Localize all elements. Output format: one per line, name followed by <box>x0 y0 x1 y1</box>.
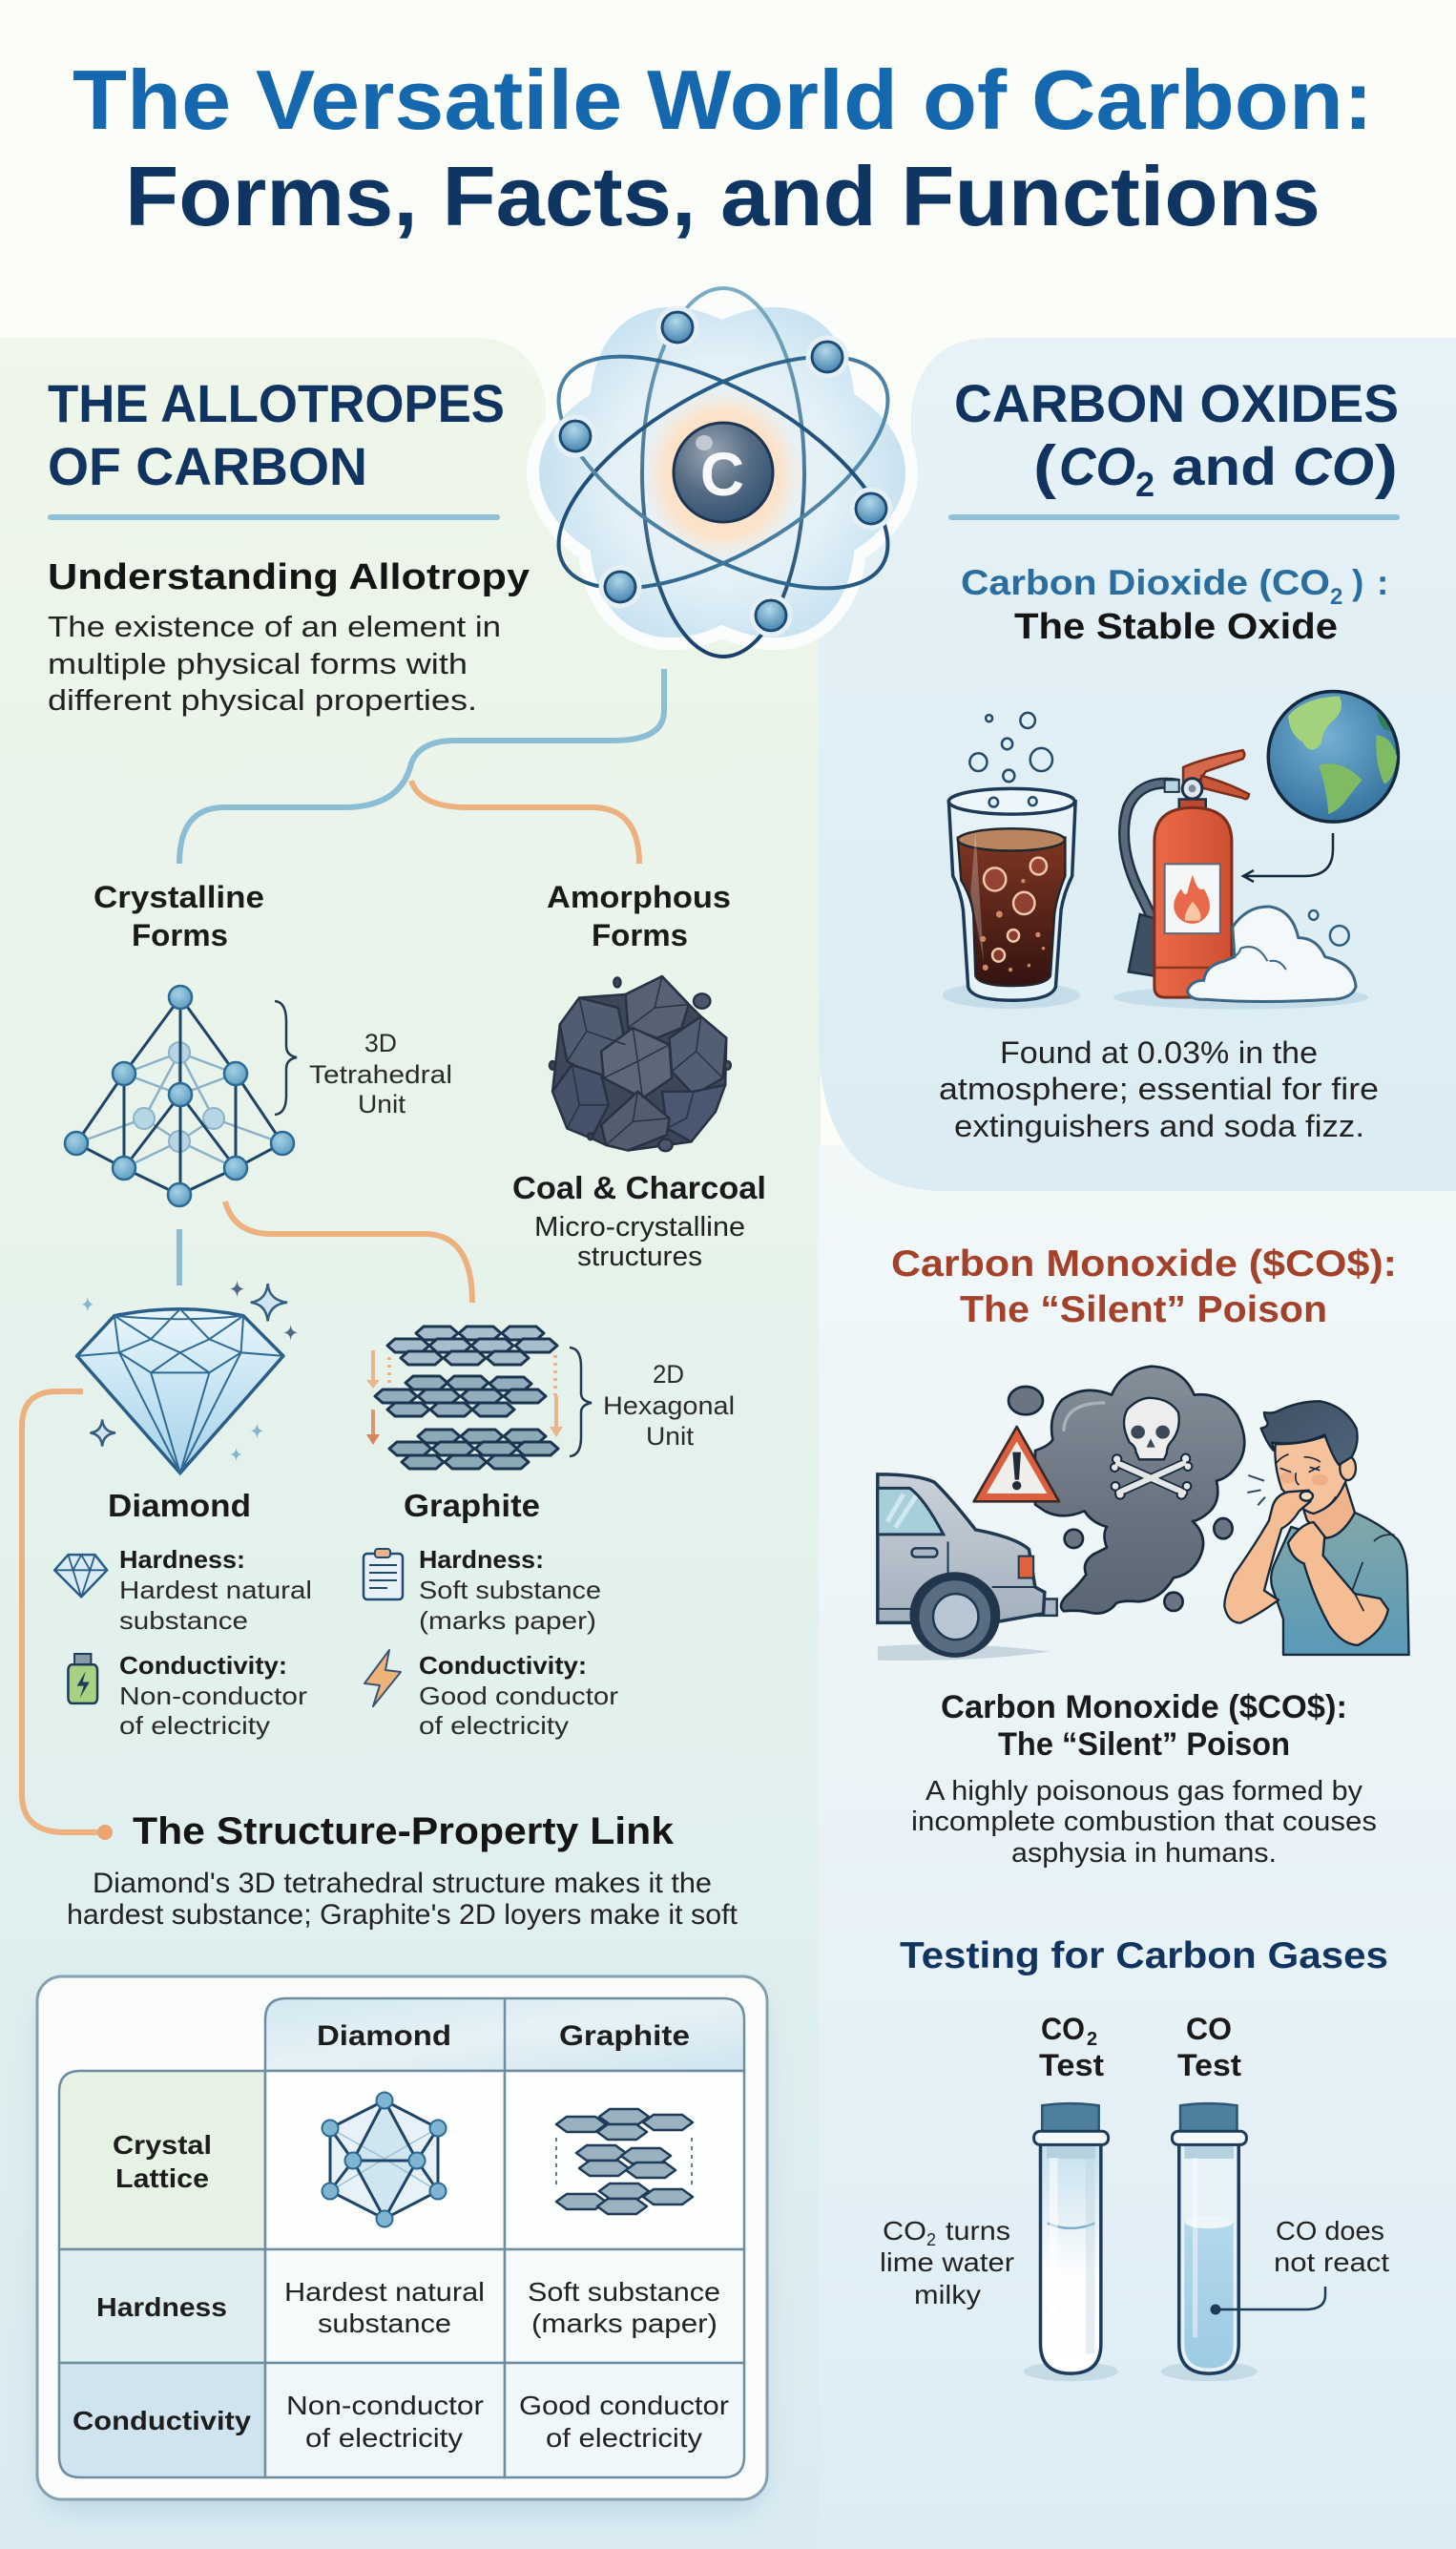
icon: warning triangle <box>974 1427 1059 1501</box>
text block: understanding allotropy: different physical properties. <box>48 683 477 717</box>
bracket: 2D unit <box>570 1348 592 1456</box>
label: crystalline forms: Forms <box>132 918 228 952</box>
icon: soda glass <box>943 713 1080 1009</box>
heading: allotropes: OF CARBON <box>48 436 367 496</box>
arrow: atmosphere to extinguisher <box>1243 833 1333 882</box>
callout: CO2 turns lime water milky: lime water <box>880 2247 1014 2277</box>
icon: mini graphite layers <box>556 2109 693 2214</box>
text block: diamond hardness: substance <box>119 1606 248 1635</box>
label: CO test <box>1177 2012 1241 2082</box>
text block: carbon monoxide description: incomplete combustion that couses <box>911 1807 1377 1837</box>
text block: understanding allotropy: Understanding Allotropy <box>48 557 530 597</box>
text block: carbon dioxide facts: Found at 0.03% in the <box>1000 1035 1318 1070</box>
icon: smoke cloud with skull <box>1009 1367 1244 1614</box>
label: crystalline forms <box>94 880 264 952</box>
text block: carbon monoxide description: Carbon Monoxide ($CO$): <box>941 1689 1347 1725</box>
text block: structure-property link: Diamond's 3D tetrahedral structure makes it the <box>93 1868 712 1899</box>
label: CO test: CO <box>1186 2012 1232 2046</box>
label: coal and charcoal: Micro-crystalline <box>534 1212 745 1243</box>
icon: coal and charcoal <box>550 976 731 1151</box>
label: crystalline forms: Crystalline <box>94 880 264 914</box>
heading: carbon dioxide: Carbon Dioxide (CO <box>961 563 1330 602</box>
icon: CO test tube <box>1161 2103 1258 2381</box>
label: 3D tetrahedral unit: 3D <box>364 1029 397 1057</box>
icon: carbon atom: C <box>700 440 744 509</box>
text block: structure-property link: The Structure-Property Link <box>133 1810 675 1852</box>
title: The Versatile World of Carbon: <box>73 52 1373 147</box>
label: 3D tetrahedral unit: Tetrahedral <box>309 1060 452 1089</box>
label: CO2 test: CO <box>1041 2012 1085 2046</box>
label: amorphous forms <box>547 880 731 952</box>
label: 3D tetrahedral unit <box>309 1029 452 1118</box>
heading: carbon oxides: ) <box>1375 434 1398 500</box>
text block: understanding allotropy: multiple physical forms with <box>48 647 468 680</box>
label: 2D hexagonal unit: Unit <box>646 1422 695 1451</box>
heading: carbon monoxide <box>891 1243 1397 1330</box>
icon: coughing man <box>1224 1401 1409 1655</box>
heading: carbon oxides: CO <box>1059 436 1135 496</box>
icon: clipboard <box>364 1549 403 1599</box>
connector: lattice to graphite <box>225 1201 472 1303</box>
table row: hardness: Soft substance <box>528 2277 720 2307</box>
text block: graphite hardness: (marks paper) <box>419 1606 596 1635</box>
icon: mini diamond lattice <box>322 2092 447 2227</box>
heading: testing for carbon gases: Testing for Carbon Gases <box>900 1935 1388 1976</box>
title <box>73 52 1373 243</box>
heading: carbon dioxide <box>961 563 1388 647</box>
connector: diamond to structure-property link <box>22 1391 113 1840</box>
text block: diamond hardness <box>119 1545 312 1635</box>
connector: crystalline and amorphous branches <box>179 669 664 864</box>
table header row: Diamond <box>317 2020 451 2052</box>
table header row: Graphite <box>559 2020 690 2052</box>
label: coal and charcoal: structures <box>577 1242 702 1272</box>
text block: structure-property link <box>67 1810 738 1931</box>
label: CO2 test: Test <box>1039 2048 1104 2082</box>
chart: 3D tetrahedral lattice <box>65 986 294 1206</box>
table row: hardness: (marks paper) <box>531 2309 718 2338</box>
text block: graphite conductivity: of electricity <box>419 1711 569 1740</box>
table row: conductivity <box>59 2363 744 2477</box>
label: coal and charcoal <box>512 1170 766 1272</box>
table row: crystal lattice: Lattice <box>115 2163 209 2193</box>
connector: lattice to diamond <box>177 1229 182 1285</box>
text block: understanding allotropy: The existence of an element in <box>48 610 501 643</box>
icon: graphite layers <box>375 1327 558 1469</box>
table row: conductivity: Conductivity <box>73 2406 251 2435</box>
title: Forms, Facts, and Functions <box>125 149 1321 243</box>
text block: carbon dioxide facts: extinguishers and soda fizz. <box>954 1109 1364 1143</box>
table row: hardness <box>59 2249 744 2363</box>
panel: lower right background <box>819 1145 1456 2549</box>
heading: carbon oxides: CARBON OXIDES <box>954 373 1399 433</box>
text block: graphite conductivity: Conductivity: <box>419 1651 587 1680</box>
text block: diamond conductivity: Conductivity: <box>119 1651 287 1680</box>
table row: conductivity: of electricity <box>546 2423 702 2453</box>
heading: carbon oxides <box>954 373 1399 504</box>
label: coal and charcoal: Coal & Charcoal <box>512 1170 766 1205</box>
heading: carbon dioxide: ) <box>1352 563 1363 602</box>
arrowheads: graphite layer sliding <box>366 1380 563 1445</box>
heading: carbon dioxide: 2 <box>1330 584 1342 610</box>
text block: carbon monoxide description: The “Silent” Poison <box>998 1726 1290 1763</box>
label: 2D hexagonal unit: Hexagonal <box>603 1391 735 1420</box>
text block: diamond conductivity: Non-conductor <box>119 1682 307 1710</box>
text block: graphite conductivity: Good conductor <box>419 1682 618 1710</box>
label: amorphous forms: Amorphous <box>547 880 731 914</box>
icon: small diamond <box>54 1555 107 1597</box>
icon: foam cloud <box>1187 907 1356 1002</box>
text block: understanding allotropy <box>48 557 530 717</box>
arrows: graphite layer sliding <box>373 1350 556 1439</box>
heading: carbon oxides: ( <box>1033 434 1056 500</box>
table row: conductivity: Good conductor <box>519 2391 729 2420</box>
text block: carbon dioxide facts: atmosphere; essential for fire <box>939 1072 1379 1106</box>
label: 3D tetrahedral unit: Unit <box>358 1090 406 1118</box>
icon: car exhaust <box>878 1474 1057 1661</box>
text block: carbon monoxide description: A highly poisonous gas formed by <box>926 1776 1363 1807</box>
heading: carbon oxides: CO <box>1293 436 1374 496</box>
icon: carbon atom <box>523 261 924 684</box>
heading: carbon dioxide: : <box>1377 563 1388 602</box>
text block: graphite conductivity <box>419 1651 618 1740</box>
icon: crossbones <box>1111 1454 1192 1499</box>
icon: CO2 test tube <box>1024 2103 1118 2381</box>
icon: skull <box>1124 1398 1179 1459</box>
text block: diamond conductivity <box>119 1651 307 1740</box>
label: CO test: Test <box>1177 2048 1241 2082</box>
panel: allotropes background <box>0 338 821 2549</box>
comparison table <box>37 1976 767 2509</box>
callout: CO does not react <box>1210 2216 1389 2315</box>
callout: CO2 turns lime water milky: 2 <box>926 2230 936 2249</box>
heading: allotropes <box>48 373 505 496</box>
label: 2D hexagonal unit <box>603 1360 735 1451</box>
text block: carbon dioxide facts <box>939 1035 1379 1143</box>
callout: CO2 turns lime water milky: turns <box>946 2216 1010 2246</box>
label: 2D hexagonal unit: 2D <box>653 1360 684 1389</box>
label: CO2 test: 2 <box>1087 2029 1097 2050</box>
table row: hardness: Hardest natural <box>284 2277 485 2307</box>
bracket: 3D unit <box>275 1001 297 1115</box>
heading: carbon monoxide: The “Silent” Poison <box>960 1289 1327 1330</box>
icon: diamond <box>77 1281 298 1473</box>
table row: crystal lattice <box>59 2071 744 2249</box>
table row: conductivity: of electricity <box>305 2423 463 2453</box>
table row: hardness: substance <box>318 2309 451 2338</box>
icon: lightning bolt <box>364 1650 401 1706</box>
label: CO2 test <box>1039 2012 1104 2082</box>
callout: CO2 turns lime water milky: milky <box>914 2280 981 2309</box>
text block: diamond hardness: Hardness: <box>119 1545 245 1574</box>
callout: CO2 turns lime water milky: CO <box>883 2216 926 2246</box>
text block: graphite hardness <box>419 1545 601 1635</box>
table row: crystal lattice: Crystal <box>113 2130 212 2160</box>
heading: carbon dioxide: The Stable Oxide <box>1014 607 1338 647</box>
table header row <box>265 1998 744 2071</box>
text block: graphite hardness: Hardness: <box>419 1545 544 1574</box>
icon: earth <box>1268 692 1398 822</box>
callout: CO does not react: not react <box>1274 2247 1389 2277</box>
label: diamond: Diamond <box>108 1488 251 1523</box>
text block: carbon monoxide description: asphysia in humans. <box>1011 1838 1277 1869</box>
heading: carbon oxides: and <box>1172 436 1277 496</box>
table row: conductivity: Non-conductor <box>286 2391 484 2420</box>
panel: carbon dioxide background <box>819 338 1456 1191</box>
label: graphite: Graphite <box>404 1488 540 1523</box>
heading: carbon monoxide: Carbon Monoxide ($CO$): <box>891 1243 1397 1285</box>
icon: fire extinguisher <box>1113 750 1368 1010</box>
label: amorphous forms: Forms <box>592 918 688 952</box>
callout: CO2 turns lime water milky <box>880 2216 1014 2309</box>
text block: diamond hardness: Hardest natural <box>119 1576 312 1604</box>
table row: hardness: Hardness <box>96 2292 227 2322</box>
text block: graphite hardness: Soft substance <box>419 1576 601 1604</box>
callout: CO does not react: CO does <box>1276 2216 1384 2246</box>
heading: carbon oxides: 2 <box>1135 465 1154 504</box>
text block: carbon monoxide description <box>911 1689 1377 1869</box>
heading: allotropes: THE ALLOTROPES <box>48 373 505 433</box>
icon: battery <box>68 1654 97 1703</box>
text block: structure-property link: hardest substance; Graphite's 2D loyers make it soft <box>67 1899 738 1931</box>
text block: diamond conductivity: of electricity <box>119 1711 270 1740</box>
